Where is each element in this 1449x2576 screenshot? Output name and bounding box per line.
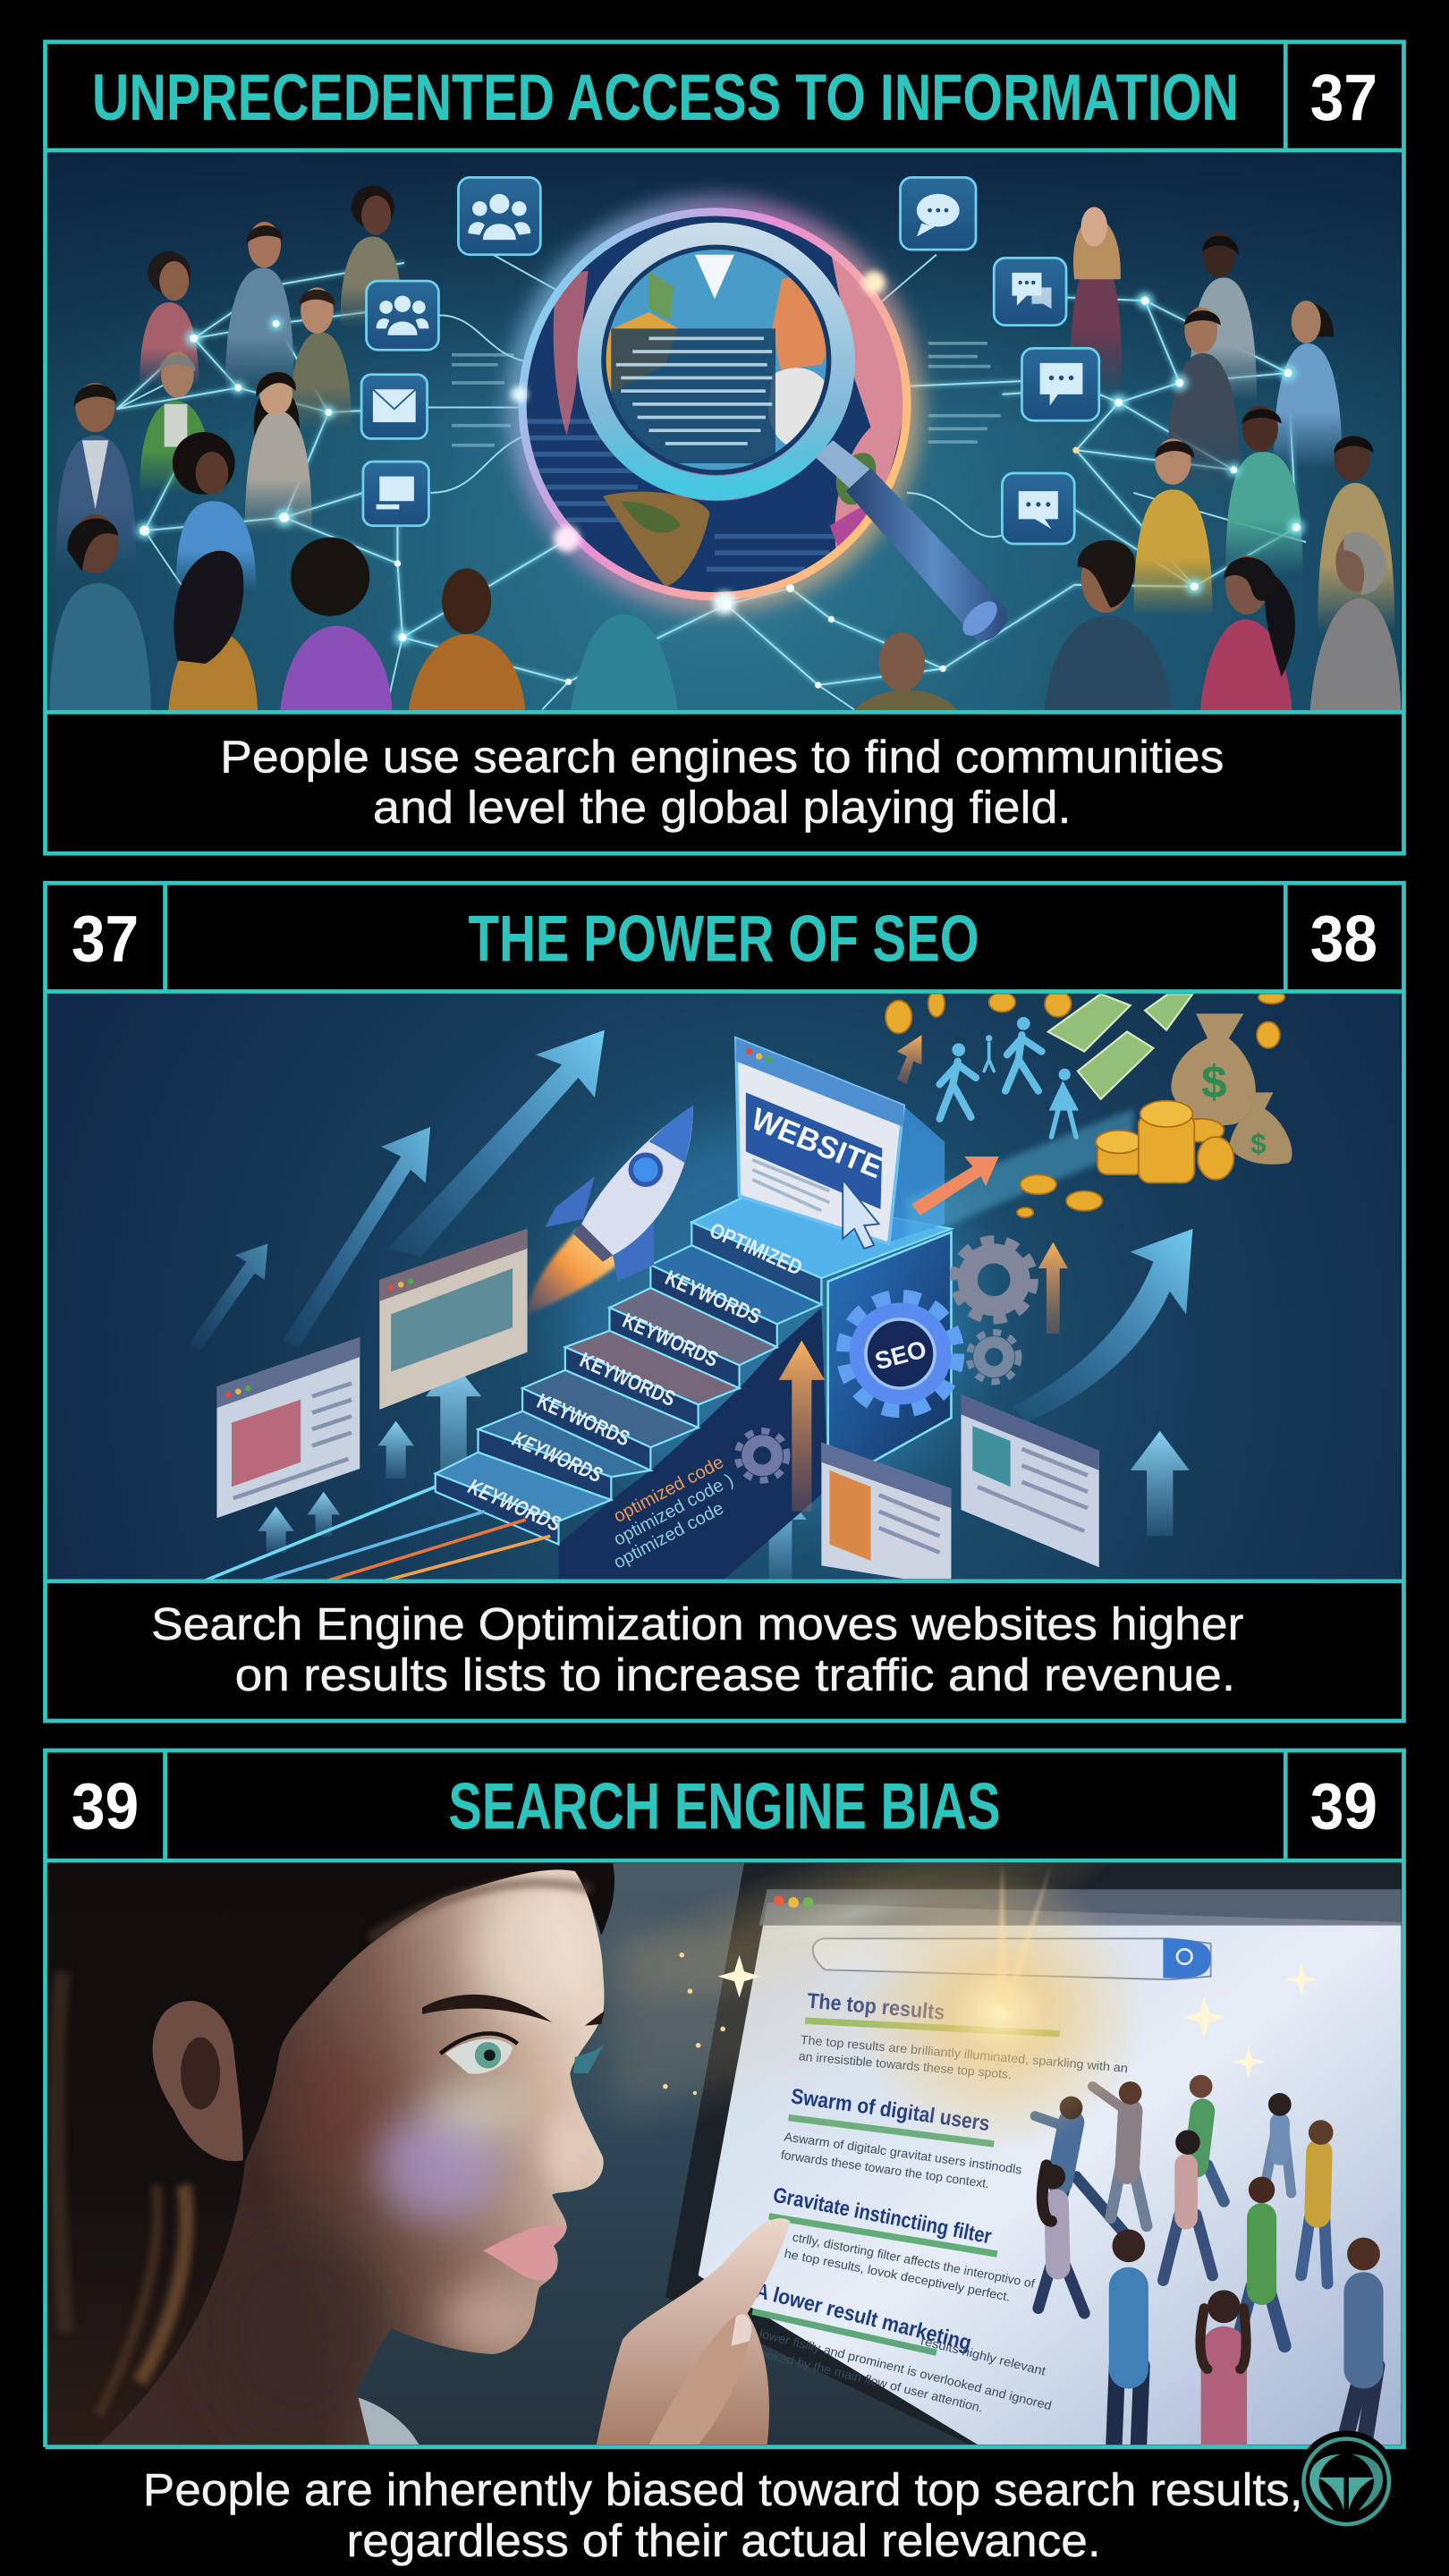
network glow [116,263,1296,685]
money bags [1171,1013,1292,1165]
woman: face and neck [98,1863,624,2445]
rocket [528,1106,693,1314]
network lines [116,255,1306,709]
people: right group [846,207,1402,723]
staircase [436,1191,951,1580]
stair labels: KEYWORDS [662,1266,765,1329]
arrow toward revenue [911,1157,999,1216]
heading: SEARCH ENGINE BIAS [448,1768,1001,1843]
website window: WEBSITE [747,1101,887,1185]
result 2: Aswarm of digitalc gravitat users instinodls [784,2130,1022,2177]
result 2: forwards these towaro the top context. [780,2148,990,2190]
result 2: Swarm of digital users [790,2084,991,2136]
stair labels: KEYWORDS [464,1475,564,1537]
glowing road [206,1487,550,1580]
result 1: an irresistible towards these top spots. [798,2049,1013,2081]
optimized code labels: optimized code [611,1453,727,1527]
caption: on results lists to increase traffic and revenue. [235,1648,1235,1700]
stair flank [558,1308,828,1580]
result 1: The top results [806,1989,945,2025]
money bills [1048,994,1192,1099]
money bags: $ [1250,1128,1267,1159]
caption [143,2463,1303,2566]
walking people [940,1017,1076,1137]
gears [738,1241,1033,1480]
result 3: he top results, lovok deceptively perfect. [784,2247,1012,2304]
SEO block [828,1233,951,1487]
woman: hair [47,1863,614,2445]
caption: People use search engines to find communities [220,730,1224,782]
caption [151,1597,1243,1700]
result 3: Gravitate instinctiing filter [771,2183,994,2249]
frame: panel 2 borders [46,883,1403,1721]
woman: lips [483,2225,567,2280]
stair labels: KEYWORDS [533,1389,633,1452]
SEO gear [844,1298,956,1410]
crowd of users [1035,2075,1380,2448]
result 4: results highly relevant [919,2334,1047,2378]
woman: ear [153,2001,243,2161]
page number left: 39 [72,1768,139,1843]
caption: People are inherently biased toward top search results, [143,2463,1303,2515]
panel: search engine bias [46,1750,1403,2566]
monitor [665,1863,1402,2445]
panel: unprecedented access to information [46,42,1403,853]
page number right: 38 [1310,901,1377,975]
frame: panel 1 borders [46,42,1403,853]
caption [220,730,1224,833]
gold coins [886,991,1284,1217]
optimized code labels: optimized code ) [611,1470,737,1550]
result 4: A lower result marketing [753,2278,974,2356]
result list [741,1989,1128,2415]
result 2 [780,2084,1022,2190]
result 1 [798,1989,1128,2081]
stair labels: OPTIMIZED [706,1218,806,1281]
result 4 [741,2278,1053,2415]
optimized code labels [611,1453,737,1572]
magnifying glass [585,235,1007,641]
top platform [691,1191,951,1278]
data text streams [452,342,1001,447]
page number left: 37 [72,901,139,975]
logo badge [1295,2430,1397,2532]
stair labels: KEYWORDS [576,1348,679,1411]
traffic streak [907,1109,1133,1245]
money bags: $ [1201,1055,1227,1107]
stair labels: KEYWORDS [509,1427,606,1487]
panel: the power of SEO [46,883,1403,1721]
caption: regardless of their actual relevance. [347,2514,1101,2566]
search bar [813,1938,1211,1979]
network nodes [136,292,1304,646]
optimized code labels: optimized code [611,1498,727,1572]
stair labels: KEYWORDS [619,1309,722,1372]
people: left group [49,186,680,723]
woman: eye and brow [422,1995,605,2074]
stair labels [464,1218,806,1537]
heading: THE POWER OF SEO [468,901,979,975]
illustration: globe, magnifier and connected people [47,153,1402,723]
icons: connected community tiles [361,177,1099,544]
result 4: A lower fisilly and prominent is overlooked and ignored [747,2324,1053,2412]
sparkle light burst [567,1778,1318,2152]
illustration: woman viewing glowing search results [47,1778,1402,2448]
illustration: staircase to website with rocket and revenue [47,991,1402,1580]
orange up arrow [779,1341,825,1512]
result 3: ctrlly, distorting filter affects the interoptivo of [792,2231,1036,2291]
SEO gear: SEO [872,1335,929,1375]
growth arrows [189,1030,1192,1423]
result 3 [769,2183,1036,2304]
woman: clothing [65,2392,419,2445]
website window [736,1038,945,1249]
page number right: 39 [1310,1768,1377,1843]
orange arrows [897,1035,1068,1334]
browser windows [216,1229,1099,1579]
result 4: indooked by the main flow of user attention. [741,2343,984,2415]
frame: panel 3 borders [46,1750,1403,2447]
caption: Search Engine Optimization moves websites higher [151,1597,1243,1649]
result 1: The top results are brilliantly illuminated, sparkling with an [800,2033,1128,2075]
globe [506,196,923,614]
page number: 37 [1310,60,1377,134]
icon glyphs [373,194,1082,529]
caption: and level the global playing field. [373,781,1072,833]
woman: hand and pointing finger [597,2218,790,2445]
